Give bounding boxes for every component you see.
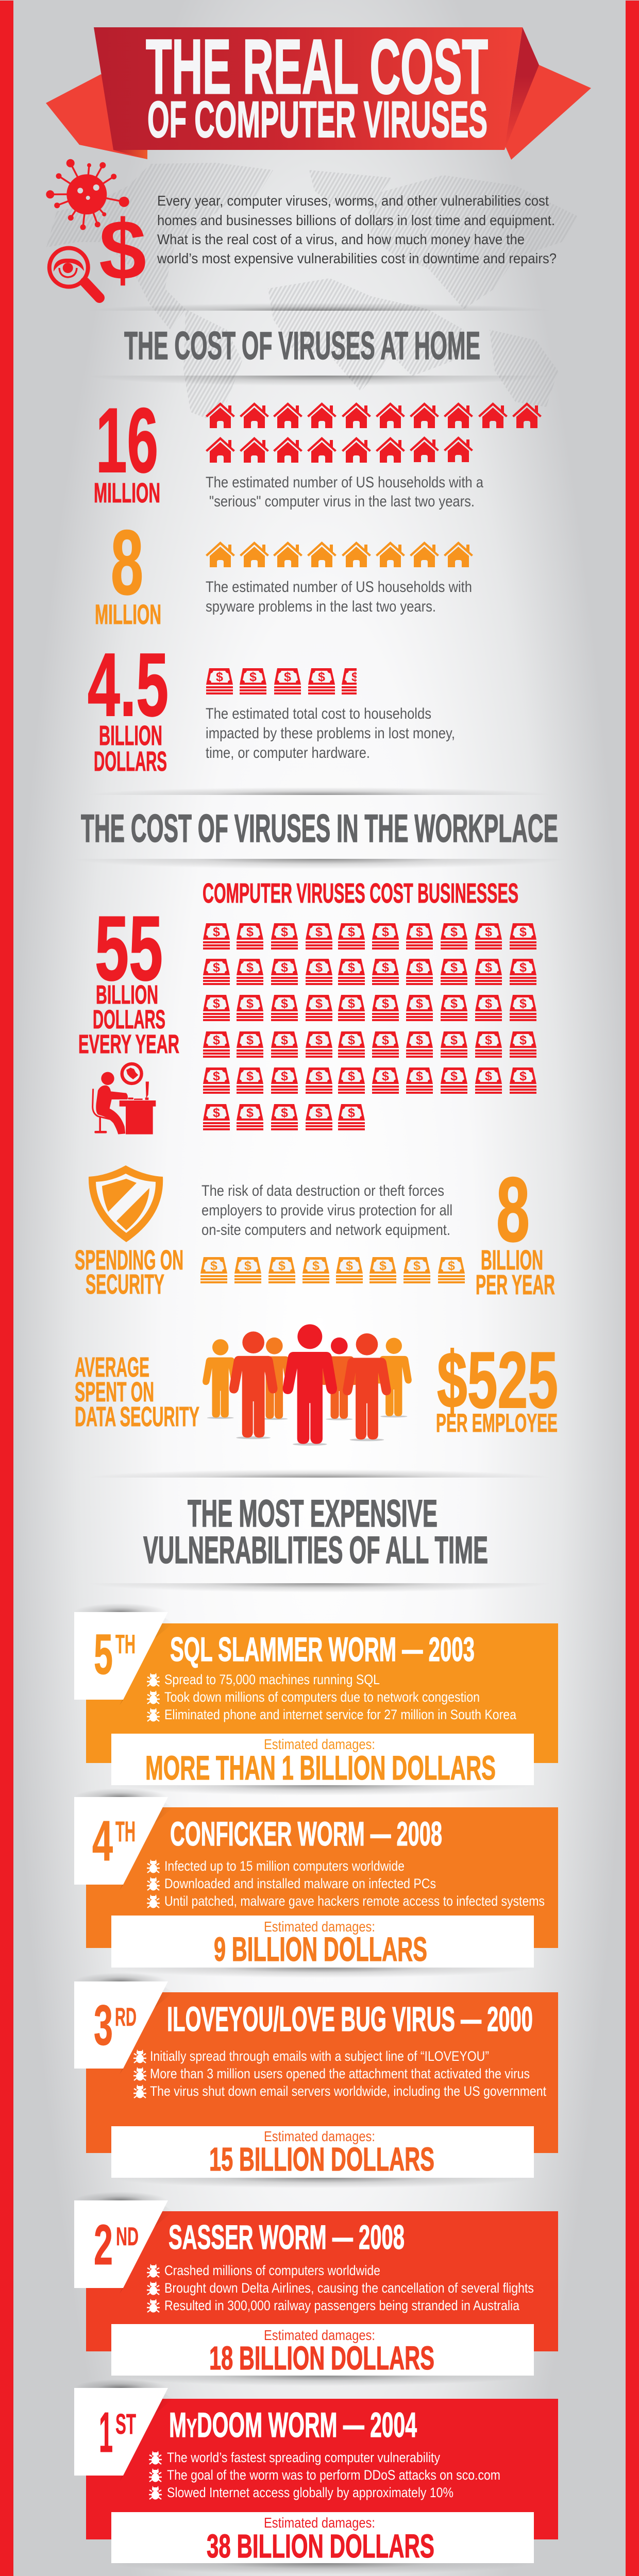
intro text: What is the real cost of a virus, and how much money have the [157, 231, 525, 247]
stat: 4.5 billion dollars: BILLION [99, 720, 162, 751]
damages box [111, 1734, 534, 1787]
stat: 4.5 billion dollars [88, 634, 169, 777]
money pictogram: 55 stacks: $ [213, 1106, 220, 1120]
damages box [111, 2512, 534, 2565]
label: average spent on data security: AVERAGE [75, 1352, 149, 1383]
money pictogram: 8 orange stacks: $ [448, 1259, 455, 1273]
intro text: homes and businesses billions of dollars in lost time and equipment. [157, 212, 555, 228]
stat: 4.5 billion dollars: DOLLARS [94, 746, 167, 777]
stat: 55 billion dollars every year: DOLLARS [93, 1005, 165, 1034]
money pictogram: 55 stacks: $ [382, 1033, 389, 1047]
money pictogram: 4.5 stacks: $ [216, 670, 223, 684]
text: data destruction risk: The risk of data destruction or theft forces [201, 1182, 444, 1199]
text: total cost: time, or computer hardware. [206, 744, 370, 761]
text: spyware: The estimated number of US households with [206, 579, 472, 596]
money pictogram: 8 orange stacks: $ [210, 1259, 217, 1273]
stat: 55 billion dollars every year [78, 897, 179, 1059]
money pictogram: 55 stacks [203, 923, 536, 1130]
heading: most expensive vulnerabilities: THE MOST EXPENSIVE [188, 1492, 438, 1535]
money pictogram: 8 orange stacks: $ [379, 1259, 386, 1273]
world map backdrop [46, 163, 578, 418]
damages box: Estimated damages: [264, 1736, 375, 1752]
bullets [147, 2263, 534, 2313]
text: data destruction risk [201, 1182, 452, 1239]
money pictogram: 55 stacks: $ [382, 996, 389, 1011]
divider shadow [72, 859, 567, 869]
money pictogram: 8 orange stacks: $ [278, 1259, 285, 1273]
money pictogram: 4.5 stacks: $ [318, 670, 325, 684]
stat: $525 per employee [436, 1335, 558, 1437]
stat: 55 billion dollars every year: BILLION [96, 980, 158, 1009]
intro text: Every year, computer viruses, worms, and other vulnerabilities cost [157, 193, 549, 209]
stat: 8 billion per year: BILLION [481, 1245, 543, 1276]
title: SASSER WORM — 2008 [169, 2218, 405, 2256]
money pictogram: 55 stacks: $ [382, 1069, 389, 1083]
money pictogram: 55 stacks: $ [348, 960, 355, 975]
money pictogram: 55 stacks: $ [485, 960, 492, 975]
money pictogram: 55 stacks: $ [485, 925, 492, 939]
divider shadow [88, 303, 551, 311]
money pictogram: 55 stacks: $ [450, 1033, 458, 1047]
text: total cost [206, 705, 455, 761]
icon: magnifier with eye [49, 248, 99, 298]
money pictogram: 55 stacks: $ [246, 1069, 254, 1083]
money pictogram: 55 stacks: $ [416, 960, 423, 975]
bullets: Resulted in 300,000 railway passengers being stranded in Australia [164, 2298, 520, 2313]
text: serious virus: The estimated number of US households with a [206, 474, 483, 491]
money pictogram: 55 stacks: $ [246, 996, 254, 1011]
money pictogram: 55 stacks: $ [450, 996, 458, 1011]
heading: most expensive vulnerabilities [143, 1492, 488, 1571]
house pictogram: 18 red houses [206, 402, 542, 463]
money pictogram: 55 stacks: $ [213, 1069, 220, 1083]
text: total cost: impacted by these problems in lost money, [206, 725, 455, 742]
text: total cost: The estimated total cost to households [206, 705, 431, 722]
money pictogram: 55 stacks: $ [246, 1106, 254, 1120]
money pictogram: 55 stacks: $ [519, 1069, 527, 1083]
title banner [46, 23, 591, 160]
rank 4th: TH [115, 1815, 136, 1848]
intro text [157, 193, 557, 266]
money pictogram: 55 stacks: $ [485, 996, 492, 1011]
money pictogram: 55 stacks: $ [416, 1069, 423, 1083]
money pictogram: 4.5 stacks [206, 668, 368, 694]
money pictogram: 55 stacks: $ [519, 925, 527, 939]
bullets: Took down millions of computers due to network congestion [164, 1689, 480, 1705]
damages box [111, 1916, 534, 1968]
bullets: Infected up to 15 million computers worldwide [164, 1858, 405, 1874]
stat: 8 billion per year: PER YEAR [476, 1269, 555, 1300]
stat: 16 million: MILLION [94, 478, 160, 509]
left red side bar [0, 1, 13, 2576]
bullets: More than 3 million users opened the attachment that activated the virus [150, 2066, 530, 2081]
bullets: The world’s fastest spreading computer vulnerability [167, 2450, 440, 2465]
money pictogram: 55 stacks: $ [315, 1033, 323, 1047]
money pictogram: 55 stacks: $ [315, 1069, 323, 1083]
stat: 55 billion dollars every year: 55 [95, 897, 163, 999]
stat: 16 million [94, 389, 160, 509]
money pictogram: 55 stacks: $ [281, 996, 288, 1011]
rank 4th: 4 [92, 1809, 113, 1873]
text: spyware [206, 579, 472, 615]
title: CONFICKER WORM — 2008 [170, 1815, 442, 1853]
rank 3rd: RD [115, 2003, 137, 2031]
stat: $525 per employee: $525 [437, 1335, 558, 1425]
stat: 8 million: MILLION [95, 599, 161, 630]
money pictogram: 55 stacks: $ [450, 960, 458, 975]
bullets: Until patched, malware gave hackers remote access to infected systems [164, 1893, 545, 1909]
money pictogram: 55 stacks: $ [213, 996, 220, 1011]
money pictogram: 8 orange stacks: $ [346, 1259, 353, 1273]
bullets [149, 2450, 500, 2500]
money pictogram: 55 stacks: $ [348, 996, 355, 1011]
panel: 3rd ILOVEYOU [74, 1973, 558, 2188]
bullets: The virus shut down email servers worldwide, including the US government [150, 2083, 546, 2099]
money pictogram: 55 stacks: $ [246, 960, 254, 975]
money pictogram: 4.5 stacks: $ [249, 670, 257, 684]
damages box [111, 2324, 534, 2377]
icon: dollar sign: $ [99, 202, 146, 297]
money pictogram: 55 stacks: $ [315, 925, 323, 939]
bullets [147, 1858, 545, 1909]
money pictogram: 55 stacks: $ [246, 1033, 254, 1047]
money pictogram: 55 stacks: $ [213, 1033, 220, 1047]
money pictogram: 55 stacks: $ [519, 960, 527, 975]
stat: 8 billion per year: 8 [496, 1158, 530, 1261]
money pictogram: 55 stacks: $ [450, 925, 458, 939]
money pictogram: 55 stacks: $ [348, 1106, 355, 1120]
money pictogram: 55 stacks: $ [281, 1069, 288, 1083]
stat: 8 million: 8 [111, 511, 143, 614]
money pictogram: 55 stacks: $ [281, 1106, 288, 1120]
bullets: Initially spread through emails with a subject line of “ILOVEYOU” [150, 2048, 489, 2064]
label: spending on security: SPENDING ON [75, 1245, 183, 1276]
money pictogram: 55 stacks: $ [213, 925, 220, 939]
bullets: Slowed Internet access globally by approximately 10% [167, 2485, 453, 2500]
money pictogram: 55 stacks: $ [416, 925, 423, 939]
text: data destruction risk: employers to provide virus protection for all [201, 1202, 452, 1219]
money pictogram: 55 stacks: $ [348, 925, 355, 939]
money pictogram: 55 stacks: $ [416, 1033, 423, 1047]
money pictogram: 55 stacks: $ [315, 1106, 323, 1120]
right red side bar [626, 1, 639, 2576]
stat: 8 million [95, 511, 161, 630]
money pictogram: 55 stacks: $ [348, 1033, 355, 1047]
bullets: Brought down Delta Airlines, causing the cancellation of several flights [164, 2280, 534, 2296]
damages box: Estimated damages: [264, 2327, 375, 2343]
money pictogram: 8 orange stacks [200, 1257, 465, 1283]
text: data destruction risk: on-site computers and network equipment. [201, 1222, 450, 1239]
money pictogram: 55 stacks: $ [519, 1033, 527, 1047]
money pictogram: 8 orange stacks: $ [413, 1259, 421, 1273]
money pictogram: 8 orange stacks: $ [312, 1259, 320, 1273]
icon: security shield [89, 1165, 163, 1242]
money pictogram: 8 orange stacks: $ [244, 1259, 251, 1273]
divider shadow [88, 376, 551, 386]
bullets: Downloaded and installed malware on infected PCs [164, 1876, 436, 1891]
text: serious virus [206, 474, 483, 510]
divider shadow [88, 1469, 551, 1478]
text: serious virus: "serious" computer virus in the last two years. [209, 493, 475, 510]
stat: $525 per employee: PER EMPLOYEE [436, 1409, 558, 1437]
money pictogram: 55 stacks: $ [485, 1069, 492, 1083]
rank 1st: 1 [99, 2401, 113, 2464]
panel: 5th SQL Slammer [74, 1603, 558, 1795]
damages box: 9 BILLION DOLLARS [214, 1930, 427, 1968]
money pictogram: 4.5 stacks: $ [351, 670, 359, 684]
money pictogram: 55 stacks: $ [416, 996, 423, 1011]
icon: group of employees [203, 1324, 412, 1446]
money pictogram: 4.5 stacks: $ [284, 670, 291, 684]
label: average spent on data security: DATA SECURITY [75, 1401, 199, 1432]
money pictogram: 55 stacks: $ [382, 960, 389, 975]
damages box: 38 BILLION DOLLARS [207, 2528, 434, 2565]
money pictogram: 55 stacks: $ [485, 1033, 492, 1047]
stat: 8 billion per year [476, 1158, 555, 1300]
title: MYDOOM WORM — 2004 [169, 2405, 417, 2445]
label: average spent on data security [75, 1352, 199, 1432]
rank 2nd: 2 [94, 2213, 113, 2277]
intro text: world’s most expensive vulnerabilities cost in downtime and repairs? [157, 250, 557, 266]
divider shadow [88, 1583, 551, 1592]
damages box [111, 2126, 534, 2178]
rank 2nd: ND [116, 2222, 139, 2251]
damages box: Estimated damages: [264, 2515, 375, 2531]
money pictogram: 55 stacks: $ [382, 925, 389, 939]
money pictogram: 55 stacks: $ [450, 1069, 458, 1083]
text: spyware: spyware problems in the last two years. [206, 598, 436, 615]
money pictogram: 55 stacks: $ [281, 925, 288, 939]
label: spending on security: SECURITY [86, 1269, 164, 1300]
stat: 16 million: 16 [96, 389, 158, 492]
damages box: 15 BILLION DOLLARS [209, 2141, 434, 2178]
bullets [133, 2048, 546, 2099]
icon: worker at infected computer [93, 1064, 156, 1134]
money pictogram: 55 stacks: $ [281, 1033, 288, 1047]
bullets: The goal of the worm was to perform DDoS attacks on sco.com [167, 2467, 500, 2483]
rank 1st: ST [115, 2408, 136, 2440]
bullets [147, 1672, 517, 1722]
rank 5th: TH [115, 1630, 136, 1659]
label: average spent on data security: SPENT ON [75, 1377, 154, 1408]
bullets: Eliminated phone and internet service for 27 million in South Korea [164, 1707, 517, 1722]
panel: 4th Conficker [74, 1788, 558, 1978]
money pictogram: 55 stacks: $ [213, 960, 220, 975]
house pictogram: 8 orange houses [206, 541, 473, 567]
money pictogram: 55 stacks: $ [519, 996, 527, 1011]
money pictogram: 55 stacks: $ [348, 1069, 355, 1083]
panel: 1st MyDoom [74, 2379, 558, 2574]
rank 3rd: 3 [94, 1994, 113, 2057]
panel: 2nd Sasser [74, 2192, 558, 2386]
stat: 4.5 billion dollars: 4.5 [88, 634, 169, 735]
money pictogram: 55 stacks: $ [246, 925, 254, 939]
damages box: 18 BILLION DOLLARS [209, 2340, 434, 2377]
label: spending on security [75, 1245, 183, 1300]
damages box: Estimated damages: [264, 1919, 375, 1935]
damages box: Estimated damages: [264, 2128, 375, 2144]
money pictogram: 55 stacks: $ [315, 996, 323, 1011]
divider shadow [88, 787, 551, 795]
bullets: Crashed millions of computers worldwide [164, 2263, 380, 2278]
rank 5th: 5 [94, 1623, 113, 1686]
bullets: Spread to 75,000 machines running SQL [164, 1672, 380, 1687]
stat: 55 billion dollars every year: EVERY YEAR [78, 1029, 179, 1059]
money pictogram: 55 stacks: $ [315, 960, 323, 975]
money pictogram: 55 stacks: $ [281, 960, 288, 975]
icon: virus [46, 159, 129, 230]
